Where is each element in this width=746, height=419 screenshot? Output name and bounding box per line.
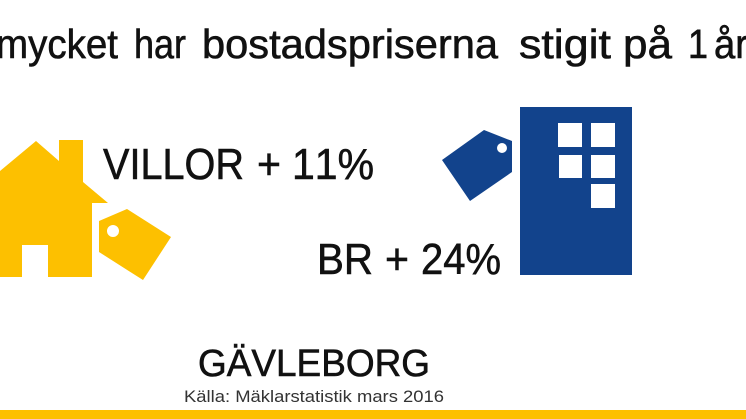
icon: blue price tag	[442, 130, 512, 201]
BR label: +	[385, 235, 409, 284]
source: Källa: Mäklarstatistik mars 2016	[184, 387, 444, 406]
villor label	[103, 140, 374, 189]
title: bostadspriserna	[202, 21, 498, 67]
icon: yellow house	[0, 140, 108, 277]
BR label: BR	[317, 235, 373, 284]
BR label: 24%	[421, 235, 501, 284]
title: 1	[688, 21, 708, 67]
title: på	[623, 21, 672, 67]
title	[0, 21, 746, 67]
villor label: VILLOR	[103, 140, 244, 189]
title: har	[134, 21, 186, 67]
bottom bar	[0, 410, 746, 419]
BR label	[317, 235, 501, 284]
villor label: +	[257, 140, 281, 189]
icon: yellow price tag	[99, 209, 171, 280]
villor label: 11%	[292, 140, 374, 189]
icon: blue apartment building	[520, 107, 632, 275]
title: stigit	[519, 21, 612, 67]
region name: GÄVLEBORG	[198, 343, 430, 385]
